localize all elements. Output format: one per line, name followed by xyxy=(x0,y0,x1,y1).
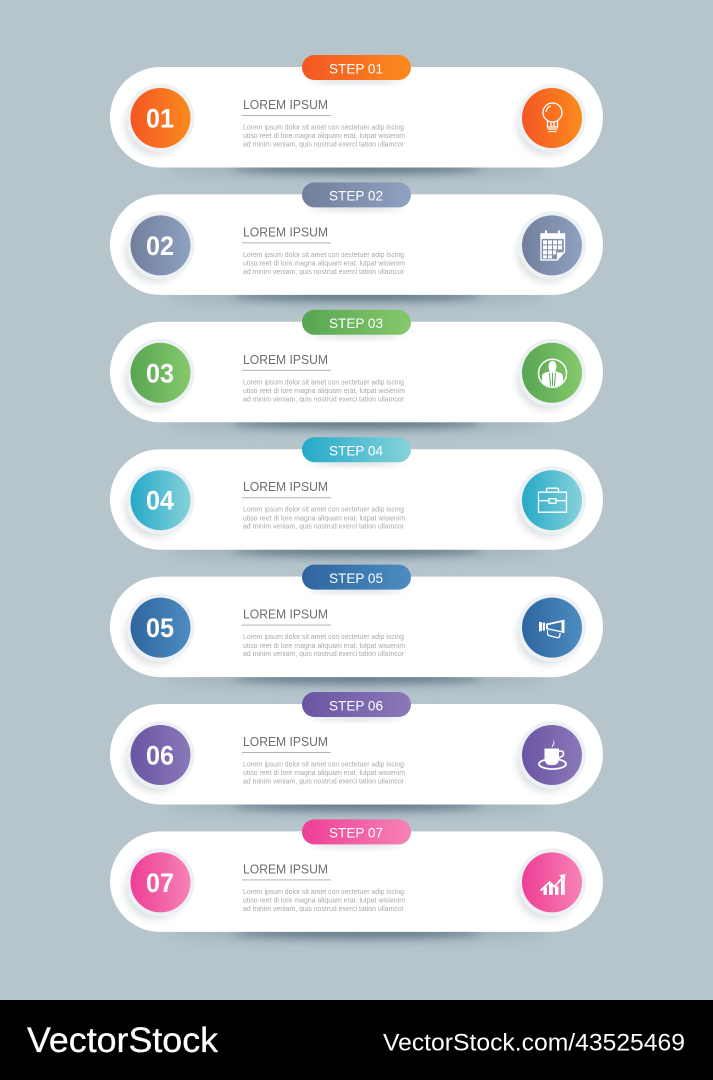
panel: step 07 xyxy=(110,819,603,941)
panel: step 05: STEP 05 xyxy=(329,570,383,586)
panel: step 07: Lorem ipsum dolor sit amet con sectetuer adip iscing xyxy=(243,887,404,896)
panel: step 03 xyxy=(110,310,603,432)
panel: step 01: 01 xyxy=(146,104,174,134)
icon: briefcase xyxy=(538,488,566,512)
logo: VectorStock xyxy=(27,1021,219,1060)
panel: step 06: LOREM IPSUM xyxy=(243,734,328,749)
panel: step 05: 05 xyxy=(146,613,174,643)
footer bar xyxy=(0,1000,713,1080)
panel: step 02: utiso reet di lore magna aliquam erat. lutpat wisienim xyxy=(243,259,405,268)
icon: light bulb xyxy=(543,103,562,132)
icon: megaphone xyxy=(539,620,564,638)
panel: step 06: 06 xyxy=(146,740,174,770)
panel: step 03: LOREM IPSUM xyxy=(243,352,328,367)
panel: step 04: ad minim veniam, quis nostrud exerci tation ullamcor xyxy=(243,522,404,531)
icon: coffee cup xyxy=(539,740,566,769)
panel: step 07: ad minim veniam, quis nostrud exerci tation ullamcor xyxy=(243,904,404,913)
panel: step 02: STEP 02 xyxy=(329,188,383,204)
panel: step 03: ad minim veniam, quis nostrud exerci tation ullamcor xyxy=(243,394,404,403)
panel: step 01 xyxy=(110,55,603,177)
panel: step 06: utiso reet di lore magna aliquam erat. lutpat wisienim xyxy=(243,768,405,777)
panel: step 04 xyxy=(110,437,603,559)
panel: step 01: utiso reet di lore magna aliquam erat. lutpat wisienim xyxy=(243,131,405,140)
panel: step 03: Lorem ipsum dolor sit amet con sectetuer adip iscing xyxy=(243,377,404,386)
panel: step 05 xyxy=(110,565,603,687)
panel: step 01: LOREM IPSUM xyxy=(243,97,328,112)
panel: step 01: Lorem ipsum dolor sit amet con sectetuer adip iscing xyxy=(243,122,404,132)
panel: step 06: STEP 06 xyxy=(329,697,383,713)
panel: step 05: utiso reet di lore magna aliquam erat. lutpat wisienim xyxy=(243,641,405,650)
panel: step 04: utiso reet di lore magna aliquam erat. lutpat wisienim xyxy=(243,513,405,522)
panel: step 04: STEP 04 xyxy=(329,443,383,459)
panel: step 02 xyxy=(110,182,603,304)
panel: step 01: STEP 01 xyxy=(329,60,383,76)
panel: step 02: 02 xyxy=(146,231,174,261)
panel: step 05: Lorem ipsum dolor sit amet con sectetuer adip iscing xyxy=(243,632,404,641)
panel: step 07: STEP 07 xyxy=(329,825,383,841)
panel: step 04: Lorem ipsum dolor sit amet con sectetuer adip iscing xyxy=(243,505,404,514)
panel: step 04: 04 xyxy=(146,486,174,516)
panel: step 07: LOREM IPSUM xyxy=(243,861,328,876)
panel: step 06: ad minim veniam, quis nostrud exerci tation ullamcor xyxy=(243,776,404,786)
icon: calendar xyxy=(541,230,564,260)
panel: step 06 xyxy=(110,692,603,814)
panel: step 05: LOREM IPSUM xyxy=(243,607,328,622)
icon: businessman xyxy=(538,359,566,387)
panel: step 03: 03 xyxy=(146,358,174,388)
panel: step 07: 07 xyxy=(146,868,174,898)
panel: step 01: ad minim veniam, quis nostrud exerci tation ullamcor xyxy=(243,140,404,148)
panel: step 02: LOREM IPSUM xyxy=(243,224,328,239)
panel: step 05: ad minim veniam, quis nostrud exerci tation ullamcor xyxy=(243,649,404,658)
panel: step 03: utiso reet di lore magna aliquam erat. lutpat wisienim xyxy=(243,386,405,395)
panel: step 02: Lorem ipsum dolor sit amet con sectetuer adip iscing xyxy=(243,250,404,259)
image id: VectorStock.com/43525469 xyxy=(383,1030,685,1056)
panel: step 04: LOREM IPSUM xyxy=(243,479,328,494)
panel: step 02: ad minim veniam, quis nostrud exerci tation ullamcor xyxy=(243,267,404,276)
panel: step 07: utiso reet di lore magna aliquam erat. lutpat wisienim xyxy=(243,896,405,905)
icon: growth chart xyxy=(540,874,566,895)
panel: step 03: STEP 03 xyxy=(329,315,383,331)
panel: step 06: Lorem ipsum dolor sit amet con sectetuer adip iscing xyxy=(243,760,404,768)
